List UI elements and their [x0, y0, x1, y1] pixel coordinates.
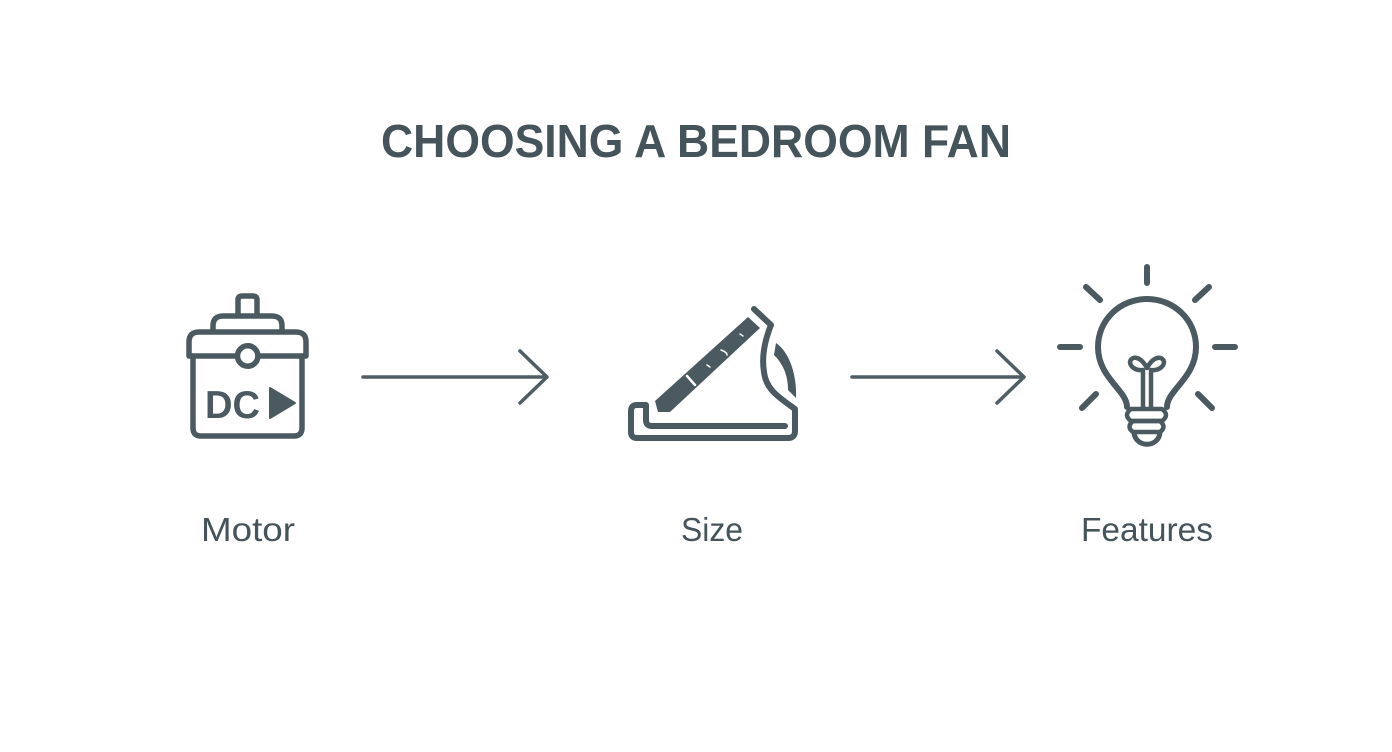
arrow: size to features — [852, 351, 1024, 403]
label: Size: Size — [681, 511, 743, 548]
icon: DC motor: DC — [205, 384, 260, 427]
label: Features: Features — [1081, 511, 1213, 548]
arrow: motor to size — [363, 351, 547, 403]
icon: light bulb — [1060, 267, 1235, 444]
icon: DC motor — [189, 296, 306, 436]
label: Motor: Motor — [201, 511, 295, 548]
title: CHOOSING A BEDROOM FAN — [381, 115, 1011, 167]
icon: size ruler — [631, 309, 796, 438]
